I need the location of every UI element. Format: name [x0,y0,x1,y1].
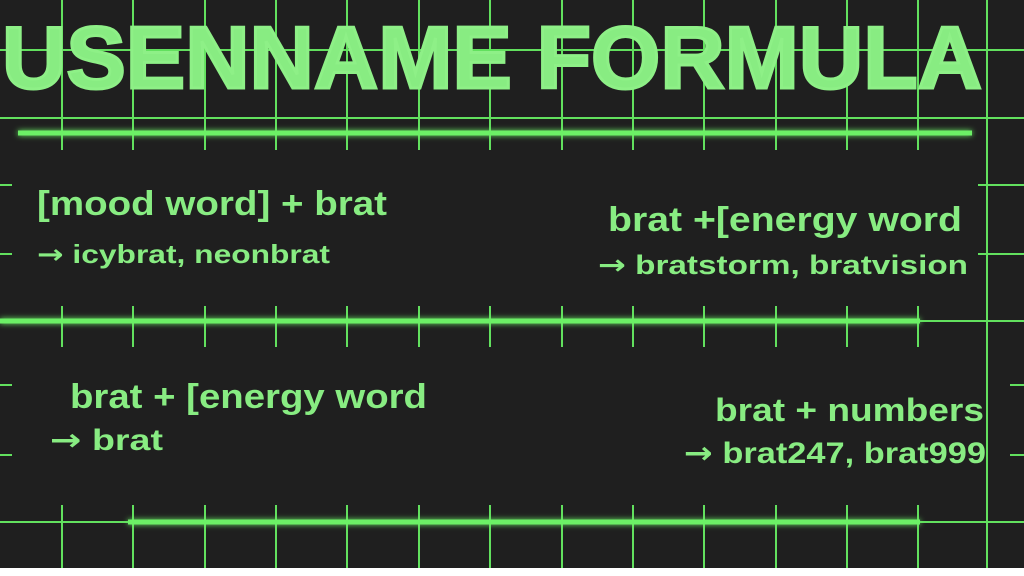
formula: energy word left: brat + [energy word [70,378,427,416]
formula: energy word right: → bratstorm, bratvision [598,250,968,281]
formula: energy word left [50,378,427,458]
formula: numbers: brat + numbers [715,392,984,428]
formula: energy word left: → brat [50,423,163,458]
formula: numbers [684,392,986,471]
formula: mood word [37,185,387,270]
formula: mood word: [mood word] + brat [37,185,387,223]
formula: energy word right: brat +[energy word [608,201,962,239]
formula: energy word right [598,201,968,281]
title: USENNAME FORMULA [2,8,982,107]
formula: mood word: → icybrat, neonbrat [37,239,330,270]
formula: numbers: → brat247, brat999 [684,436,986,471]
